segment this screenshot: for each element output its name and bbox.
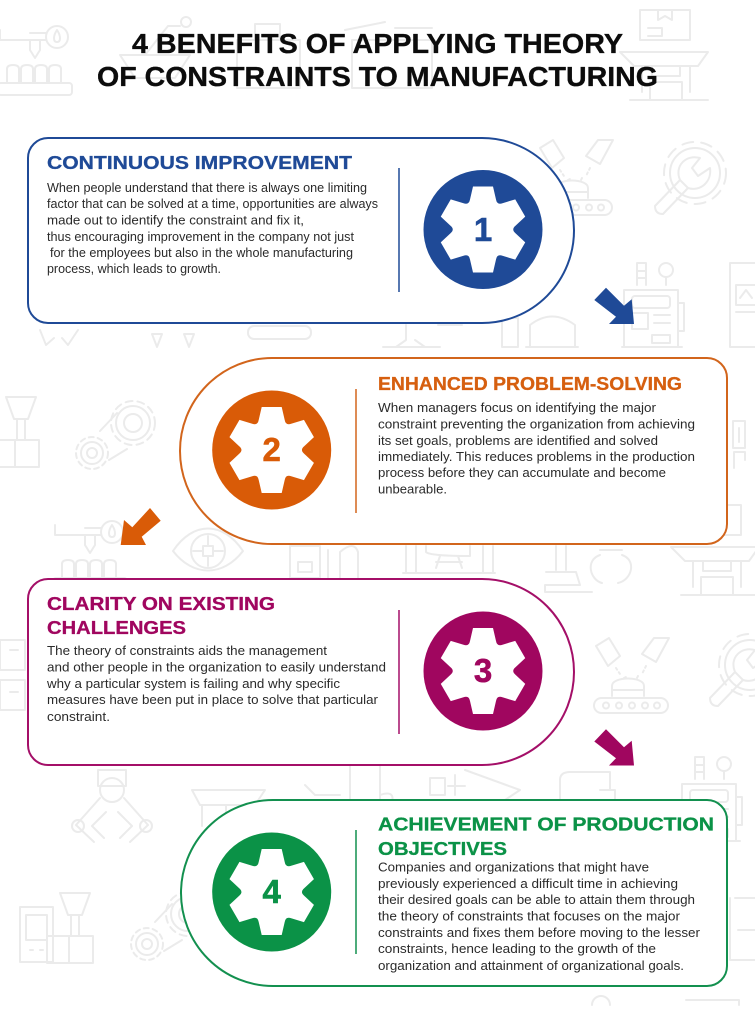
icon: gear badge 2: 2: [263, 431, 281, 468]
icon: dispenser over bottles second: [53, 521, 127, 590]
title: [97, 28, 658, 92]
heading: clarity on existing challenges: CLARITY ON EXISTING: [47, 594, 275, 614]
text: achievement body: constraints and fixes them before moving to the lesser: [378, 925, 701, 940]
text: continuous improvement body: made out to identify the constraint and fix it,: [47, 212, 304, 228]
icon: spray robots second: [594, 638, 669, 713]
icon: gear badge 4: 4: [263, 873, 282, 910]
icon: spray robots and conveyor: [538, 140, 613, 215]
icon: control box: [20, 907, 53, 962]
text: continuous improvement body: [47, 180, 378, 276]
icon: robots behind title: [120, 22, 432, 88]
icon: right edge widget: [733, 421, 745, 468]
icon: control panel machine: [622, 263, 684, 347]
icon: gear badge 1: 1: [474, 211, 492, 248]
icon: conveyor under first card: [248, 326, 311, 339]
text: achievement body: previously experienced a difficult time in achieving: [378, 876, 678, 891]
icon: gear badge 3: [424, 612, 542, 730]
icon: machine right edge: [730, 898, 755, 960]
text: enhanced problem-solving body: unbearable.: [378, 482, 447, 496]
arrow: card 1 to card 2: [594, 288, 634, 324]
text: clarity body: why a particular system is failing and why specific: [46, 676, 341, 691]
text: clarity body: The theory of constraints aids the management: [47, 643, 327, 658]
text: achievement body: Companies and organizations that might have: [378, 860, 649, 874]
text: enhanced problem-solving body: constraint preventing the organization from achieving: [378, 416, 695, 432]
text: continuous improvement body: factor that can be solved at a time, opportunities are always: [47, 196, 378, 211]
icon: control panel second: [680, 757, 742, 841]
text: continuous improvement body: When people understand that there is always one limiting: [47, 180, 367, 195]
icon: gear pair second: [131, 892, 210, 960]
icon: screen at right edge: [730, 263, 755, 347]
text: clarity body: and other people in the organization to easily understand: [47, 660, 386, 674]
heading: clarity on existing challenges: CHALLENGES: [47, 618, 186, 638]
icon: gear badge 1: [424, 170, 542, 289]
icon: tower and claw: [545, 546, 631, 592]
text: enhanced problem-solving body: When managers focus on identifying the major: [378, 400, 657, 415]
text: enhanced problem-solving body: immediately. This reduces problems in the production: [378, 449, 695, 464]
icon: press second: [671, 505, 755, 595]
text: clarity body: measures have been put in place to solve that particular: [47, 692, 379, 707]
arrow: card 3 to card 4: [594, 729, 634, 766]
panel: clarity on existing challenges: [28, 579, 574, 765]
text: achievement body: [378, 860, 701, 973]
arrow: card 2 to card 3: [121, 508, 161, 545]
icon: machine boxes: [290, 546, 358, 578]
icon: box stack left: [0, 640, 25, 710]
heading: achievement of production objectives: [378, 814, 714, 859]
text: achievement body: organization and attainment of organizational goals.: [378, 958, 684, 973]
panel: achievement of production objectives: [181, 800, 727, 986]
text: achievement body: the theory of constraints that focuses on the major: [378, 908, 681, 924]
icon: faint bottom fragments: [592, 996, 739, 1005]
text: continuous improvement body: process, which leads to growth.: [47, 261, 221, 276]
panel: continuous improvement: [28, 138, 574, 323]
text: achievement body: their desired goals can be able to attain them through: [378, 892, 695, 907]
title: 4 BENEFITS OF APPLYING THEORY: [132, 28, 623, 59]
heading: achievement of production objectives: OBJECTIVES: [378, 839, 507, 859]
text: enhanced problem-solving body: [378, 400, 695, 496]
text: achievement body: constraints, hence leading to the growth of the: [378, 941, 656, 956]
heading: achievement of production objectives: ACHIEVEMENT OF PRODUCTION: [378, 814, 714, 834]
icon: robot claw: [72, 770, 152, 842]
icon: gear badge 3: 3: [474, 652, 492, 689]
icon: items under first card: [40, 316, 578, 347]
icon: small circle joint: [181, 17, 191, 27]
text: clarity body: [46, 643, 386, 724]
icon: printer press: [620, 10, 708, 100]
icon: gear badge 4: [212, 832, 331, 952]
heading: enhanced problem-solving: ENHANCED PROBLEM-SOLVING: [378, 374, 682, 394]
text: continuous improvement body: for the employees but also in the whole manufacturing: [50, 245, 353, 260]
icon: gear pair: [76, 401, 155, 469]
icon: funnel machine second: [47, 893, 93, 963]
title: OF CONSTRAINTS TO MANUFACTURING: [97, 61, 658, 92]
icon: camera and items above fourth card: [192, 765, 615, 826]
icon: funnel machine: [0, 397, 39, 467]
heading: clarity on existing challenges: [47, 594, 275, 638]
icon: eye with chip: [173, 528, 243, 570]
heading: continuous improvement: CONTINUOUS IMPROVEMENT: [47, 153, 352, 173]
text: enhanced problem-solving body: its set goals, problems are identified and solved: [378, 433, 658, 448]
icon: wrench gear second: [710, 634, 755, 706]
icon: monitor station: [403, 546, 495, 573]
panel: enhanced problem-solving: [180, 358, 727, 544]
icon: gear badge 2: [212, 390, 331, 510]
text: clarity body: constraint.: [47, 709, 110, 724]
text: continuous improvement body: thus encouraging improvement in the company not just: [47, 229, 354, 244]
icon: dispenser over bottles: [0, 26, 72, 95]
icon: gear with wrench: [655, 142, 726, 214]
text: enhanced problem-solving body: process before they can accumulate and become: [378, 465, 666, 480]
